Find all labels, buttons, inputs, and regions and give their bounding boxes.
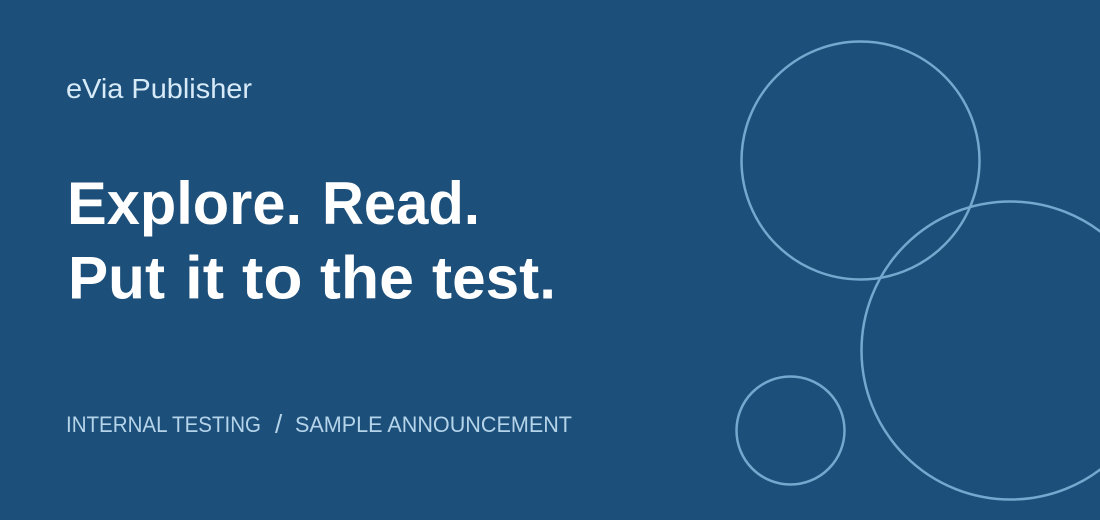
tagline [66,409,572,439]
title [67,170,556,312]
title: to [242,244,302,312]
tagline: SAMPLE ANNOUNCEMENT [295,412,572,437]
title: test. [432,244,556,312]
tagline: / [275,409,283,439]
title: Read. [322,170,480,237]
title: Put [68,244,165,312]
title: it [185,244,224,312]
title: the [320,244,414,312]
tagline: INTERNAL TESTING [66,412,261,437]
decorative circles [736,42,1100,500]
publisher name: eVia Publisher [66,73,252,104]
title: Explore. [67,170,302,237]
